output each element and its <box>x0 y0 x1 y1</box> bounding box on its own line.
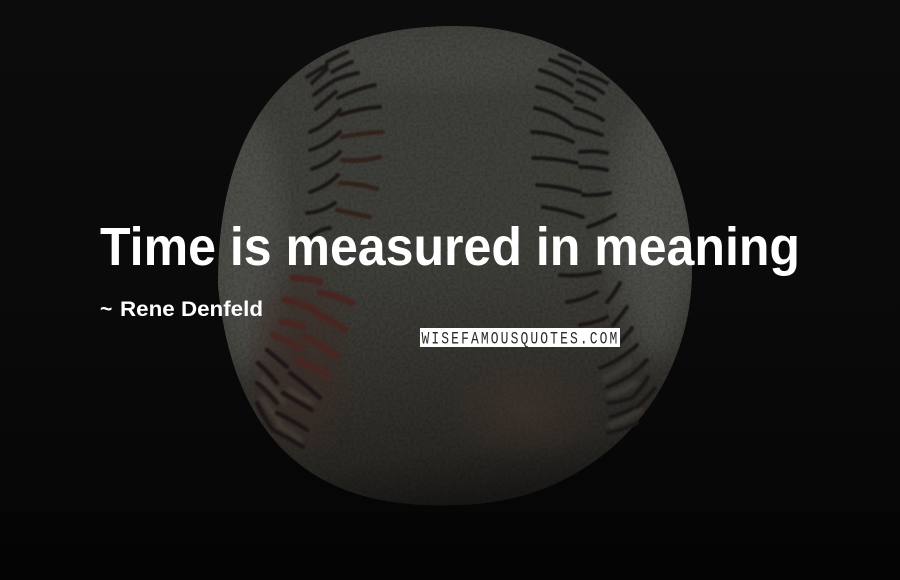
author attribution: ~ <box>100 298 112 321</box>
left seam stitches, upper <box>307 52 380 237</box>
left seam thread bumps <box>262 378 312 440</box>
quote text: Time is measured in meaning <box>100 217 800 277</box>
quote card <box>100 26 797 506</box>
baseball <box>207 20 700 510</box>
right seam stitches, lower <box>560 272 655 433</box>
right seam thread bumps <box>605 362 640 425</box>
right seam stitches, upper <box>532 55 615 227</box>
author attribution: Rene Denfeld <box>120 297 263 321</box>
watermark: WISEFAMOUSQUOTES.COM <box>422 329 617 349</box>
left seam stitches, lower <box>273 278 352 375</box>
